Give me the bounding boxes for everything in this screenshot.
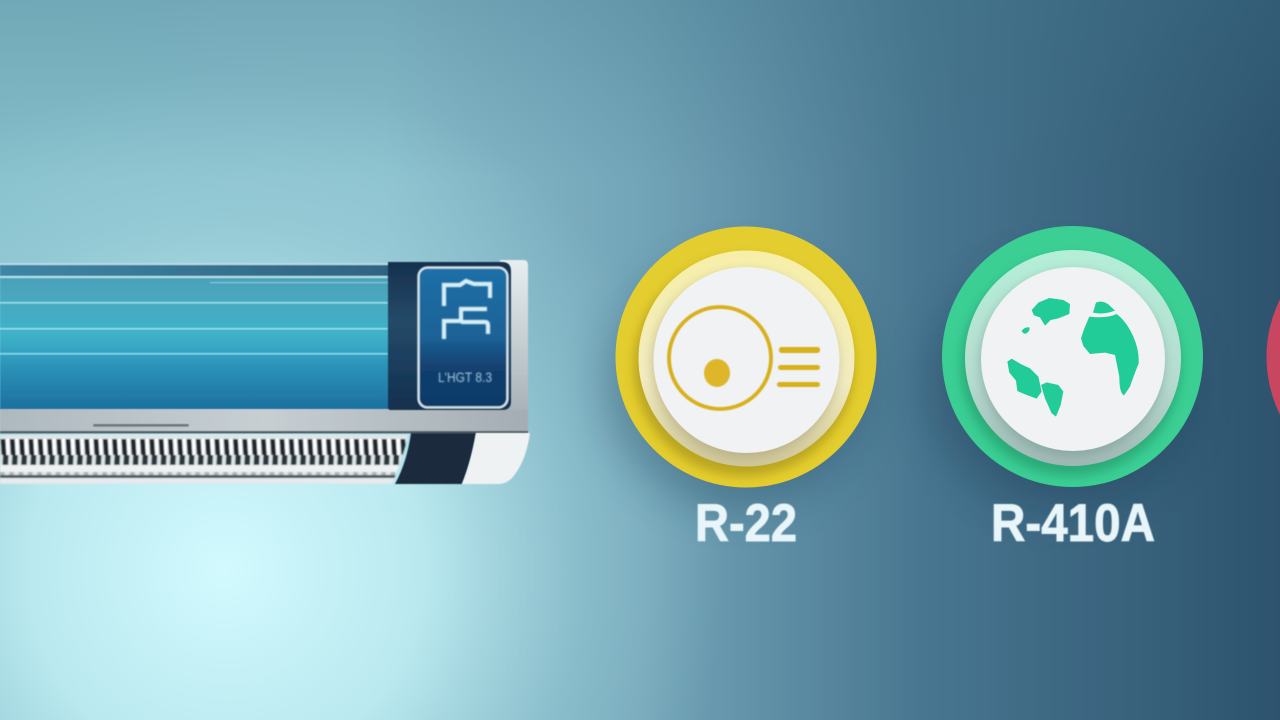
display screen <box>418 268 508 408</box>
badge: R-410A <box>928 226 1203 507</box>
icon: circle with dot and lines <box>669 307 820 409</box>
right end cap <box>500 260 528 410</box>
unit body with cooling panel <box>0 263 392 412</box>
air conditioner unit <box>0 260 530 484</box>
white disc <box>981 267 1165 451</box>
pale inner ring <box>965 250 1181 466</box>
badge: partially visible red disc <box>1266 226 1280 488</box>
dark control panel <box>388 262 511 410</box>
outer yellow disc <box>616 226 876 488</box>
pale inner ring <box>638 250 854 466</box>
outer green disc <box>942 226 1203 487</box>
icon: globe continents <box>1007 298 1139 417</box>
display small text: L'HGT 8.3 <box>438 369 492 385</box>
white disc <box>654 267 840 453</box>
lower white vent flap <box>462 433 530 484</box>
label: R-22: R-22 <box>695 494 797 553</box>
display glyph <box>444 281 490 339</box>
silver front rail <box>0 409 528 433</box>
vent grille <box>0 435 408 484</box>
badge: R-22 <box>603 226 876 507</box>
lower dark vent flap <box>395 433 476 484</box>
label: R-410A: R-410A <box>991 494 1155 553</box>
